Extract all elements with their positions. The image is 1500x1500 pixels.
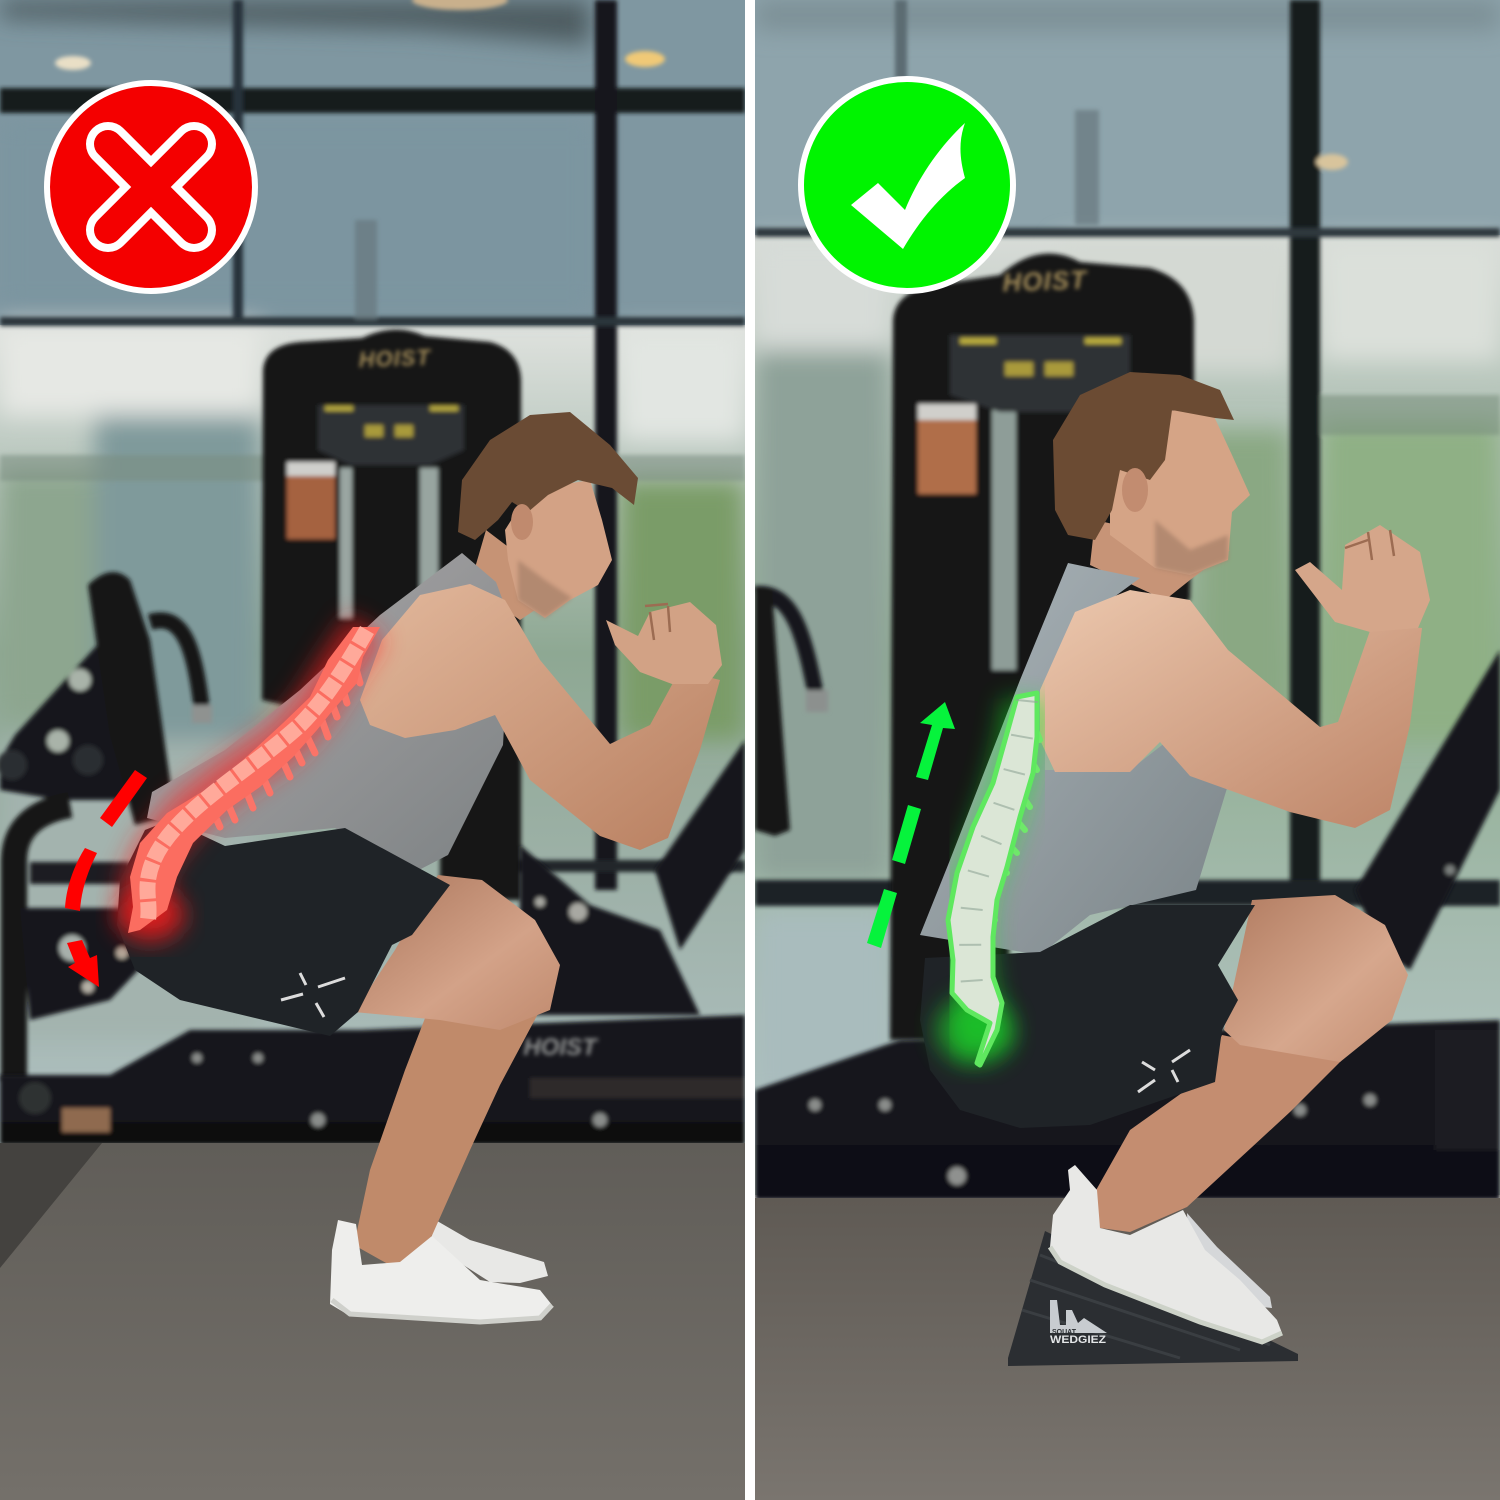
shorts reflective mark xyxy=(1138,1050,1190,1092)
thigh xyxy=(354,875,560,1030)
bench behind the subject xyxy=(520,740,745,1015)
beard shadow xyxy=(518,560,572,618)
machine brand label: HOIST xyxy=(358,345,432,372)
back shoe xyxy=(1187,1213,1272,1308)
panel: incorrect squat, flat feet and rounded back xyxy=(0,0,745,1500)
gym background windows and machines xyxy=(0,0,745,1145)
panel: correct squat, heels raised on wedge and straight back xyxy=(755,0,1500,1500)
machine brand label: HOIST xyxy=(1002,265,1089,297)
wedge product xyxy=(1008,1231,1298,1366)
logo small word: SQUAT xyxy=(1052,1329,1077,1336)
arrow: green dashed upward xyxy=(867,702,955,948)
machine base frame xyxy=(755,1020,1500,1200)
icon: green circle with check xyxy=(801,79,1013,291)
shorts xyxy=(920,905,1255,1128)
subject: man squatting on wedge xyxy=(920,372,1430,1342)
hair xyxy=(458,412,638,540)
calf xyxy=(357,1015,538,1263)
neck xyxy=(1090,520,1230,600)
fist xyxy=(606,602,722,684)
bench behind the subject xyxy=(1355,650,1500,970)
ear xyxy=(511,504,533,540)
machine tower xyxy=(890,254,1194,1040)
arm and shoulder xyxy=(360,584,720,850)
wedge logo xyxy=(1050,1300,1107,1346)
neck xyxy=(476,530,534,620)
face xyxy=(1110,410,1250,575)
shirt xyxy=(147,553,510,872)
calf xyxy=(1095,1035,1342,1232)
front shoe xyxy=(330,1220,552,1322)
back leg shoe xyxy=(432,1218,548,1283)
shorts xyxy=(117,820,450,1036)
thigh xyxy=(1224,895,1408,1062)
handle on left machine xyxy=(755,590,828,836)
arrow: red dashed downward curve xyxy=(65,770,147,987)
shorts reflective mark xyxy=(281,973,345,1017)
beard shadow xyxy=(1155,520,1228,575)
hair xyxy=(1053,372,1234,540)
spine highlight: green xyxy=(937,693,1040,1065)
finger creases and ring xyxy=(1345,530,1394,560)
fist xyxy=(1295,525,1430,632)
logo wordmark: WEDGIEZ xyxy=(1050,1334,1106,1346)
finger creases and ring xyxy=(645,604,670,640)
shirt xyxy=(920,563,1228,955)
gym background windows and machines xyxy=(755,0,1500,1200)
base brand label: HOIST xyxy=(523,1034,599,1061)
ear xyxy=(1122,468,1148,512)
arm and shoulder xyxy=(1040,590,1422,828)
floor xyxy=(0,1143,745,1500)
machine base frame xyxy=(0,1015,745,1145)
floor xyxy=(755,1198,1500,1500)
subject: man squatting on flat floor xyxy=(116,412,722,1322)
icon: red circle with X xyxy=(47,83,255,291)
left plate machine xyxy=(0,572,212,1080)
face xyxy=(505,480,612,618)
spine highlight: red xyxy=(116,627,380,941)
machine tower xyxy=(262,329,521,900)
wedge ribbing xyxy=(1022,1255,1270,1358)
front shoe xyxy=(1050,1165,1282,1342)
